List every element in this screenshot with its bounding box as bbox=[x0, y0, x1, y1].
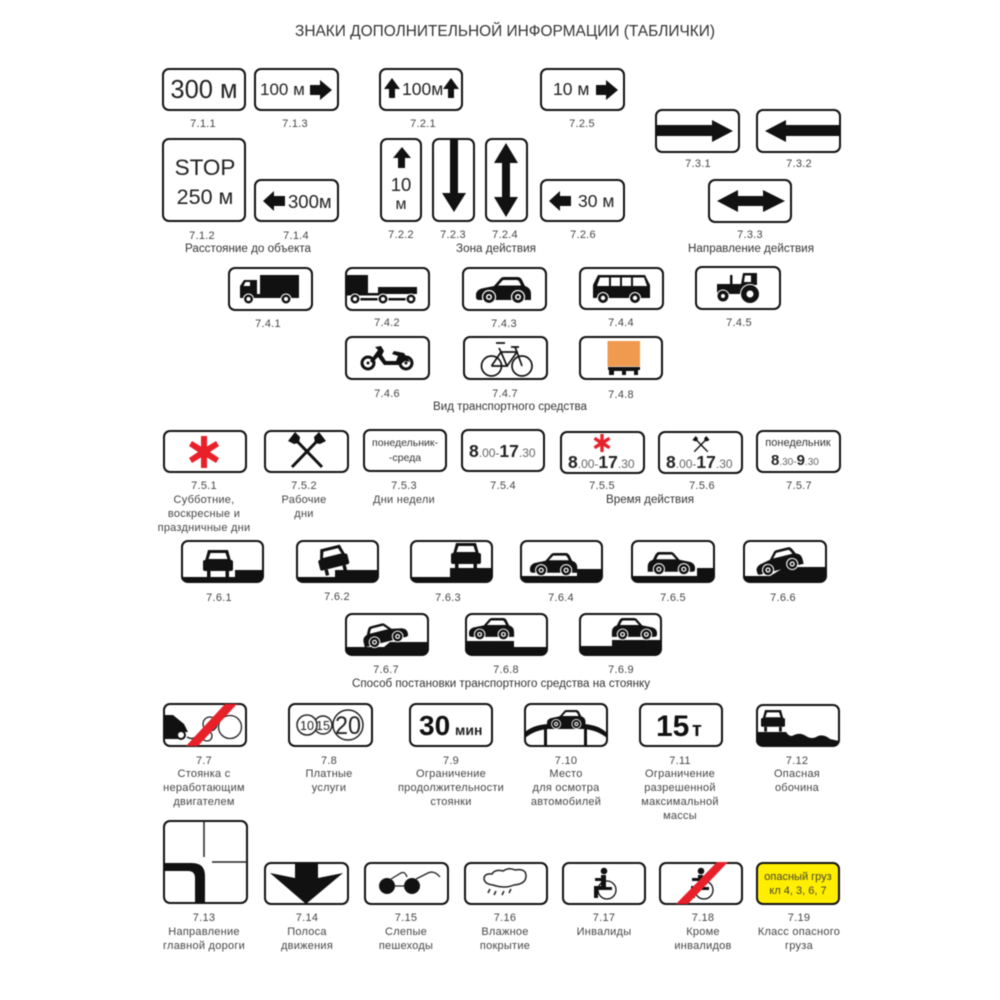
label 7.12: Опасная bbox=[774, 768, 820, 780]
label 7.6.6: 7.6.6 bbox=[770, 592, 796, 604]
label 7.5.3: Дни недели bbox=[373, 494, 435, 506]
sign 7.5.1 red asterisk bbox=[164, 431, 246, 472]
label 7.1.3: 7.1.3 bbox=[282, 118, 308, 130]
sign 7.2.1 bbox=[380, 69, 462, 110]
sign 7.10 inspection ramp bbox=[525, 704, 607, 746]
sign 7.6.2 bbox=[296, 541, 378, 582]
label 7.2.3: 7.2.3 bbox=[440, 229, 466, 241]
label 7.4.4: 7.4.4 bbox=[608, 317, 634, 329]
sign 7.5.3 days of week bbox=[364, 430, 446, 471]
sign 7.2.3 bbox=[433, 139, 474, 221]
label 7.5.4: 7.5.4 bbox=[490, 480, 516, 492]
sign 7.2.2: м bbox=[396, 196, 406, 213]
sign 7.4.5 tractor bbox=[696, 267, 780, 309]
label 7.2.2: 7.2.2 bbox=[388, 229, 414, 241]
sign 7.14 lane bbox=[265, 863, 348, 904]
label 7.5.1: Субботние, bbox=[174, 494, 234, 506]
sign 7.2.6 bbox=[541, 180, 624, 221]
sign 7.6.1 bbox=[181, 541, 263, 582]
label 7.11: Ограничение bbox=[645, 768, 715, 780]
sign 7.2.5 bbox=[541, 69, 624, 110]
sign 7.7 engine off bbox=[164, 704, 246, 746]
label 7.7: неработающим bbox=[163, 782, 245, 794]
sign 7.5.6 hammers and hours: 8.00-17.30 bbox=[666, 452, 733, 472]
label 7.4.6: 7.4.6 bbox=[374, 388, 400, 400]
label 7.5.6: 7.5.6 bbox=[689, 480, 715, 492]
sign 7.1.3 bbox=[255, 69, 338, 110]
sign 7.5.5 red asterisk and hours bbox=[561, 432, 644, 473]
label 7.17 bbox=[577, 912, 631, 938]
label 7.11: массы bbox=[663, 810, 697, 822]
sign 7.8 paid services: 10 bbox=[300, 718, 314, 733]
label 7.4.7: 7.4.7 bbox=[492, 388, 518, 400]
sign 7.5.5 red asterisk and hours: 8.00-17.30 bbox=[568, 452, 635, 472]
label 7.7: двигателем bbox=[173, 796, 235, 808]
caption: distance: Расстояние до объекта bbox=[185, 243, 312, 255]
sign 7.5.7 monday hours bbox=[757, 431, 840, 472]
label 7.5.1: воскресные и bbox=[168, 508, 240, 520]
sign 7.8 paid services: 20 bbox=[335, 712, 361, 740]
label 7.15: пешеходы bbox=[379, 940, 433, 952]
label 7.15: Слепые bbox=[385, 926, 427, 938]
sign 7.8 paid services bbox=[289, 704, 372, 746]
label 7.10: для осмотра bbox=[533, 782, 600, 794]
caption: time of action: Время действия bbox=[606, 494, 694, 506]
sign 7.6.4 bbox=[520, 541, 602, 582]
sign 7.8 paid services: 15 bbox=[316, 718, 330, 733]
sign 7.11 max mass: 15 bbox=[656, 710, 689, 743]
caption: direction: Направление действия bbox=[688, 243, 814, 255]
sign 7.19 hazard class: кл 4, 3, 6, 7 bbox=[769, 885, 827, 897]
label 7.8: Платные bbox=[305, 768, 353, 780]
sign 7.6.9 bbox=[579, 614, 661, 655]
sign 7.2.2: 10 bbox=[391, 174, 411, 195]
caption: zone: Зона действия bbox=[456, 243, 536, 255]
label 7.12 bbox=[774, 755, 820, 794]
label 7.18: 7.18 bbox=[692, 912, 714, 924]
sign 7.2.2 bbox=[381, 139, 421, 221]
label 7.15: 7.15 bbox=[395, 912, 417, 924]
label 7.5.3: 7.5.3 bbox=[391, 480, 417, 492]
sign 7.5.6 hammers and hours bbox=[659, 432, 742, 473]
label 7.7: 7.7 bbox=[196, 755, 212, 767]
label 7.6.1: 7.6.1 bbox=[206, 592, 232, 604]
label 7.9: стоянки bbox=[430, 796, 472, 808]
sign 7.19 hazard class bbox=[757, 863, 839, 904]
label 7.6.7: 7.6.7 bbox=[373, 664, 399, 676]
label 7.2.6: 7.2.6 bbox=[570, 229, 596, 241]
caption: vehicle type: Вид транспортного средства bbox=[433, 401, 588, 413]
label 7.13: Направление bbox=[168, 926, 240, 938]
label 7.13 bbox=[163, 912, 245, 952]
label 7.19: Класс опасного bbox=[758, 926, 840, 938]
label 7.9 bbox=[398, 755, 504, 808]
label 7.4.5: 7.4.5 bbox=[726, 317, 752, 329]
sign 7.17 disabled bbox=[563, 863, 645, 904]
sign 7.4.4 bus bbox=[580, 268, 663, 309]
label 7.10: Место bbox=[549, 768, 583, 780]
sign 7.5.3 days of week: -среда bbox=[389, 452, 421, 464]
sign 7.4.1 truck bbox=[229, 268, 312, 310]
label 7.17: 7.17 bbox=[593, 912, 615, 924]
label 7.14 bbox=[281, 912, 333, 952]
sign 7.4.2 road train bbox=[346, 268, 429, 310]
caption: parking method: Способ постановки транспортного средства на стоянку bbox=[352, 678, 650, 690]
label 7.4.2: 7.4.2 bbox=[374, 317, 400, 329]
label 7.2.1: 7.2.1 bbox=[410, 118, 436, 130]
label 7.14: движения bbox=[281, 940, 333, 952]
label 7.5.1: праздничные дни bbox=[158, 522, 250, 534]
label 7.6.5: 7.6.5 bbox=[660, 592, 686, 604]
label 7.14: Полоса bbox=[287, 926, 327, 938]
sign 7.16 wet surface bbox=[465, 863, 547, 904]
sign 7.19 hazard class: опасный груз bbox=[764, 871, 832, 883]
sign 7.9 parking duration bbox=[410, 704, 492, 746]
sign 7.3.3 bbox=[709, 180, 791, 222]
label 7.9: продолжительности bbox=[398, 782, 504, 794]
sign 7.2.6: 30 м bbox=[578, 191, 614, 211]
label 7.12: обочина bbox=[775, 782, 820, 794]
sign 7.1.2: STOP bbox=[175, 155, 235, 180]
label 7.9: Ограничение bbox=[416, 768, 486, 780]
sign 7.4.6 moto bbox=[346, 337, 429, 379]
sign 7.5.7 monday hours: понедельник bbox=[765, 437, 831, 449]
label 7.1.1: 7.1.1 bbox=[190, 118, 216, 130]
label 7.10: автомобилей bbox=[531, 796, 601, 808]
label 7.5.1 bbox=[158, 480, 250, 534]
label 7.5.2 bbox=[281, 480, 327, 520]
label 7.6.4: 7.6.4 bbox=[548, 592, 574, 604]
label 7.18: Кроме bbox=[686, 926, 720, 938]
sign 7.2.4 bbox=[486, 139, 527, 221]
sign 7.5.4 hours bbox=[462, 430, 544, 471]
sign 7.4.8 dangerous cargo bbox=[580, 337, 662, 379]
label 7.16: 7.16 bbox=[494, 912, 516, 924]
sign 7.1.4 bbox=[255, 180, 338, 221]
sign 7.6.6 bbox=[743, 541, 826, 582]
label 7.8 bbox=[305, 755, 353, 794]
sign 7.3.1 bbox=[656, 110, 739, 152]
sign 7.1.2: 250 м bbox=[177, 185, 233, 209]
label 7.6.3: 7.6.3 bbox=[435, 592, 461, 604]
label 7.18 bbox=[674, 912, 732, 952]
sign 7.1.1: 300 м bbox=[170, 76, 238, 104]
sign 7.15 blind pedestrians bbox=[365, 863, 448, 904]
label 7.10: 7.10 bbox=[555, 755, 577, 767]
label 7.5.2: 7.5.2 bbox=[291, 480, 317, 492]
sign 7.5.4 hours: 8.00-17.30 bbox=[469, 441, 536, 461]
label 7.4.8: 7.4.8 bbox=[608, 389, 634, 401]
label 7.3.2: 7.3.2 bbox=[786, 158, 812, 170]
label 7.16: Влажное bbox=[481, 926, 529, 938]
label 7.1.4: 7.1.4 bbox=[283, 230, 309, 242]
sign 7.6.3 bbox=[410, 541, 492, 582]
sign 7.2.5: 10 м bbox=[553, 79, 589, 99]
label 7.3.1: 7.3.1 bbox=[685, 158, 711, 170]
sign 7.4.7 bicycle bbox=[464, 337, 547, 379]
label 7.19: груза bbox=[785, 940, 814, 952]
label 7.14: 7.14 bbox=[296, 912, 318, 924]
label 7.5.1: 7.5.1 bbox=[191, 480, 217, 492]
sign 7.1.1 bbox=[163, 69, 245, 110]
label 7.7 bbox=[163, 755, 245, 808]
sign 7.6.5 bbox=[631, 541, 714, 582]
label 7.10 bbox=[531, 755, 601, 808]
sign 7.9 parking duration: мин bbox=[455, 722, 482, 738]
label 7.4.3: 7.4.3 bbox=[491, 318, 517, 330]
label 7.8: 7.8 bbox=[321, 755, 337, 767]
label 7.13: главной дороги bbox=[163, 940, 245, 952]
sign 7.11 max mass: т bbox=[692, 719, 702, 741]
label 7.2.5: 7.2.5 bbox=[569, 118, 595, 130]
label 7.2.4: 7.2.4 bbox=[492, 229, 518, 241]
label 7.5.2: Рабочие bbox=[281, 494, 327, 506]
label 7.12: 7.12 bbox=[786, 755, 808, 767]
label 7.6.2: 7.6.2 bbox=[324, 591, 350, 603]
sign 7.5.3 days of week: понедельник- bbox=[372, 437, 438, 449]
label 7.1.2: 7.1.2 bbox=[189, 230, 215, 242]
sign 7.9 parking duration: 30 bbox=[419, 710, 450, 741]
label 7.8: услуги bbox=[312, 782, 346, 794]
label 7.3.3: 7.3.3 bbox=[737, 229, 763, 241]
sign 7.11 max mass bbox=[640, 704, 722, 746]
sign 7.1.2 bbox=[163, 139, 245, 221]
label 7.16 bbox=[480, 912, 530, 952]
label 7.6.8: 7.6.8 bbox=[493, 664, 519, 676]
label 7.9: 7.9 bbox=[443, 755, 459, 767]
label 7.11: 7.11 bbox=[669, 755, 691, 767]
label 7.11: максимальной bbox=[641, 796, 719, 808]
label 7.6.9: 7.6.9 bbox=[608, 664, 634, 676]
label 7.15 bbox=[379, 912, 433, 952]
label 7.16: покрытие bbox=[480, 940, 530, 952]
sign 7.1.4: 300м bbox=[288, 191, 332, 212]
sign 7.3.2 bbox=[757, 110, 840, 152]
label 7.13: 7.13 bbox=[193, 912, 215, 924]
label 7.19 bbox=[758, 912, 840, 952]
label 7.7: Стоянка с bbox=[178, 768, 231, 780]
label 7.5.5: 7.5.5 bbox=[589, 480, 615, 492]
sign 7.6.8 bbox=[465, 614, 547, 655]
label 7.17: Инвалиды bbox=[577, 926, 631, 938]
sign 7.13 main road direction bbox=[164, 821, 247, 903]
label 7.5.7: 7.5.7 bbox=[786, 480, 812, 492]
sign 7.5.2 hammers bbox=[265, 431, 348, 472]
label 7.5.3 bbox=[373, 480, 435, 506]
sign 7.4.3 car bbox=[463, 268, 546, 310]
title: ЗНАКИ ДОПОЛНИТЕЛЬНОЙ ИНФОРМАЦИИ (ТАБЛИЧКИ) bbox=[295, 22, 715, 40]
label 7.4.1: 7.4.1 bbox=[255, 318, 281, 330]
sign 7.18 except disabled bbox=[660, 862, 742, 904]
label 7.11 bbox=[641, 755, 719, 822]
label 7.5.2: дни bbox=[294, 508, 314, 520]
label 7.18: инвалидов bbox=[674, 940, 732, 952]
sign 7.5.7 monday hours: 8.30-9.30 bbox=[771, 452, 819, 469]
sign 7.6.7 bbox=[345, 614, 428, 655]
label 7.19: 7.19 bbox=[788, 912, 810, 924]
label 7.11: разрешенной bbox=[644, 782, 716, 794]
sign 7.12 dangerous shoulder bbox=[756, 705, 839, 746]
sign 7.2.1: 100м bbox=[402, 79, 443, 99]
sign 7.1.3: 100 м bbox=[260, 80, 305, 99]
